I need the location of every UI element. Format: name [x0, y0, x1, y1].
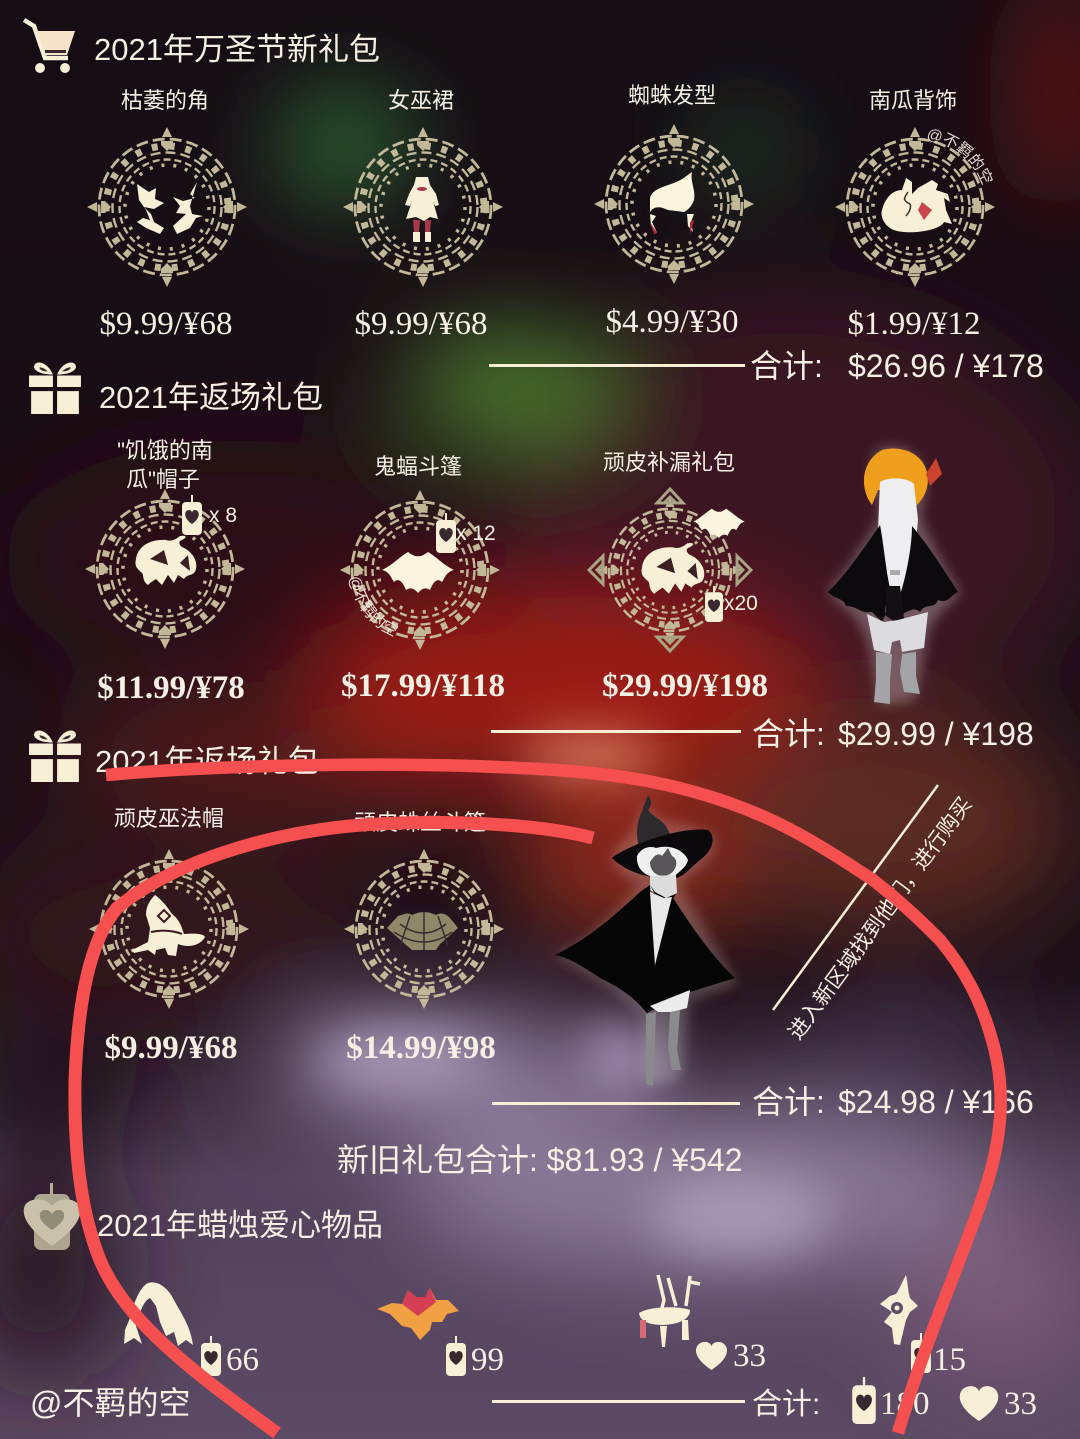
price: $14.99/¥98 [346, 1030, 496, 1066]
icon: gift [29, 363, 81, 414]
grand total: 新旧礼包合计: $81.93 / ¥542 [337, 1142, 743, 1178]
item: mischief witch hat [89, 806, 249, 1066]
item: bat cape: x 12 [456, 522, 496, 545]
item: maple leaf: 99 [471, 1342, 504, 1378]
total: 33 [1004, 1386, 1037, 1422]
item: mischief spider cape: 顽皮蛛丝斗篷 [354, 810, 486, 835]
item: chair [639, 1275, 766, 1374]
annotation: red hand-drawn circle [75, 765, 1001, 1433]
total [491, 716, 1034, 752]
heading: 2021年蜡烛爱心物品 [97, 1208, 383, 1243]
watermark: @不羁的空 [348, 577, 398, 637]
item: maple leaf [377, 1288, 504, 1378]
total [489, 348, 1044, 384]
item: mischief spider cape [344, 810, 504, 1066]
item: mischief bundle: 顽皮补漏礼包 [603, 450, 735, 475]
total: 180 [880, 1386, 930, 1422]
item: horn: 枯萎的角 [121, 88, 209, 113]
item: flower mask: 15 [933, 1342, 966, 1378]
section: candle and heart items [24, 1183, 1037, 1424]
price: $9.99/¥68 [355, 306, 487, 342]
character: pumpkin hat and bat cape [828, 447, 960, 705]
item: spider hair: 蜘蛛发型 [628, 83, 716, 108]
heading: 2021年万圣节新礼包 [94, 32, 380, 67]
item: mischief bundle [589, 450, 768, 704]
item: long hair: 66 [226, 1342, 259, 1378]
total [492, 1377, 1037, 1424]
icon: gift [29, 731, 81, 782]
item: flower mask [880, 1275, 966, 1378]
total [492, 1084, 1034, 1120]
total: $29.99 / ¥198 [838, 716, 1034, 752]
item: pumpkin back accessory: 南瓜背饰 [869, 88, 957, 113]
character: witch hat and cape [555, 795, 738, 1086]
item: bat cape [340, 454, 505, 704]
item: spider hair [594, 83, 754, 340]
total: 合计: [752, 716, 825, 752]
item: hungry pumpkin hat: 瓜"帽子 [126, 467, 200, 492]
watermark: @不羁的空 [30, 1385, 190, 1421]
price: $29.99/¥198 [602, 668, 768, 704]
section: 2021 returning packs in new area [29, 731, 1034, 1178]
item: hungry pumpkin hat: "饥饿的南 [117, 438, 213, 463]
total: $26.96 / ¥178 [848, 348, 1044, 384]
price: $4.99/¥30 [606, 304, 738, 340]
note: diagonal text: 进入新区域找到他们，进行购买 [784, 793, 977, 1044]
total: 合计: [750, 348, 823, 384]
total: 合计: [752, 1084, 825, 1120]
price: $9.99/¥68 [100, 306, 232, 342]
item: horn [87, 88, 247, 342]
price: $1.99/¥12 [848, 306, 980, 342]
total: $24.98 / ¥166 [838, 1084, 1034, 1120]
total: 合计: [752, 1388, 820, 1421]
item: mischief bundle: x20 [724, 592, 758, 615]
item: pumpkin back accessory [835, 88, 995, 342]
item: mischief witch hat: 顽皮巫法帽 [114, 806, 224, 831]
heading: 2021年返场礼包 [95, 744, 319, 779]
note: diagonal line [773, 785, 938, 1010]
price: $9.99/¥68 [105, 1030, 237, 1066]
heading: 2021年返场礼包 [99, 380, 323, 415]
item: chair: 33 [733, 1338, 766, 1374]
item: hungry pumpkin hat: x 8 [209, 504, 237, 527]
item: long hair [124, 1282, 259, 1378]
section: 2021 Halloween new packs [22, 18, 1044, 384]
section: 2021 returning packs [29, 362, 1034, 752]
price: $17.99/¥118 [341, 668, 505, 704]
watermark: @不羁的空 [928, 129, 993, 185]
price: $11.99/¥78 [97, 670, 245, 706]
item: witch dress: 女巫裙 [388, 88, 454, 113]
icon: shopping cart [24, 20, 75, 73]
item: hungry pumpkin hat [85, 438, 245, 706]
item: bat cape: 鬼蝠斗篷 [374, 454, 462, 479]
item: witch dress [343, 88, 503, 342]
icon: large candle [24, 1183, 80, 1250]
